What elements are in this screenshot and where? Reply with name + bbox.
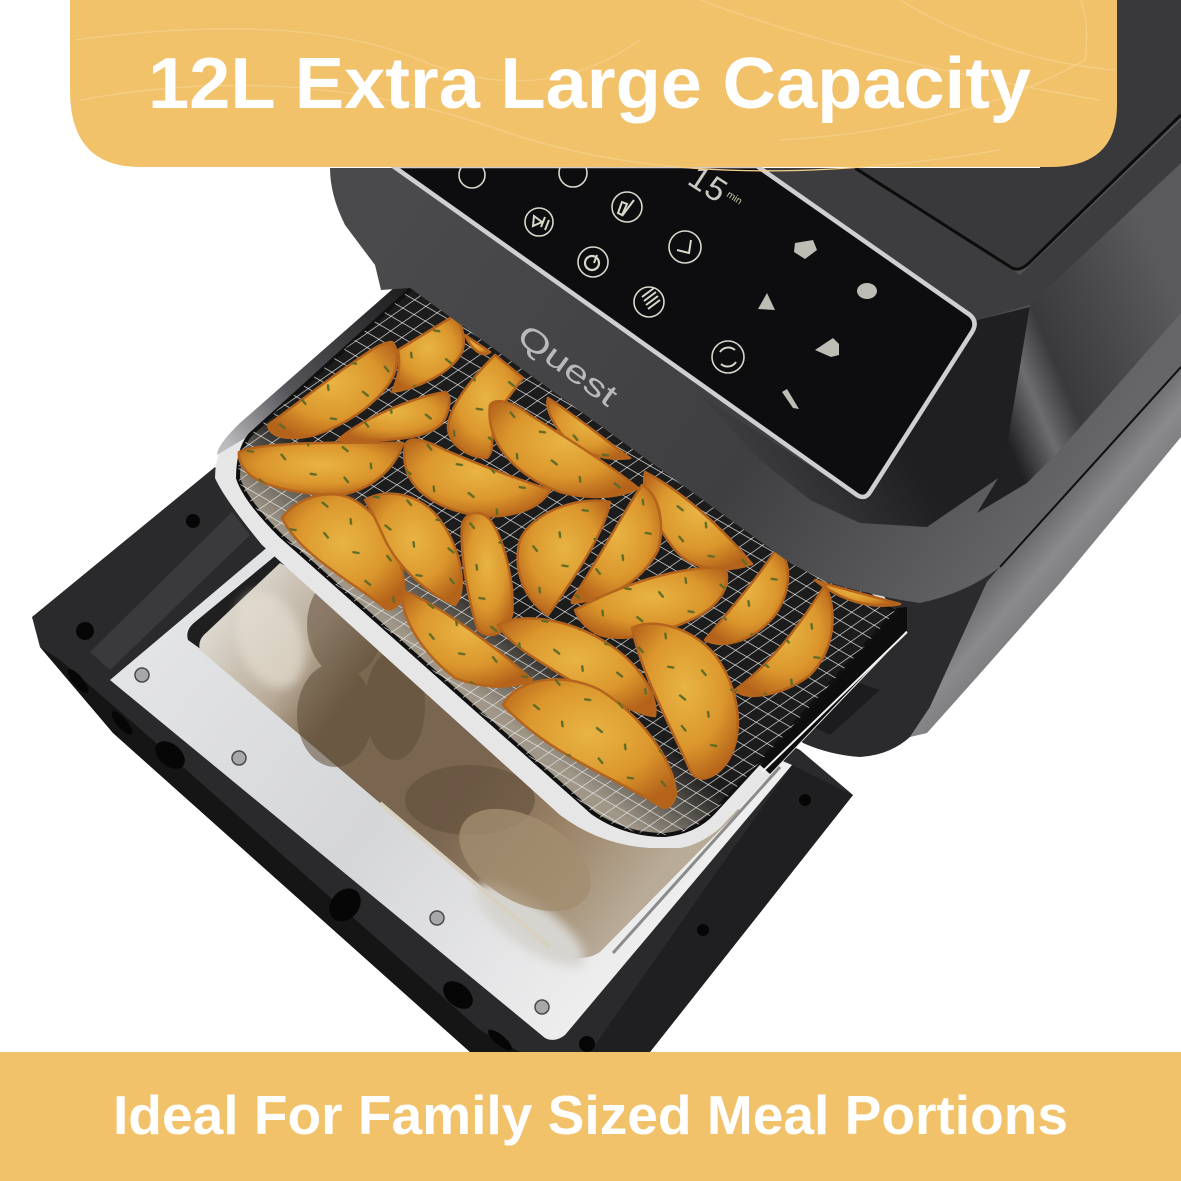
frame holes [65,514,811,1053]
mesh grid [238,288,895,835]
drawer frame [32,467,853,1053]
wedge shadows in tray [297,573,535,835]
tray screws [135,668,549,1014]
lower air fryer body [760,367,1181,757]
potato wedges [239,317,900,808]
control panel: min [724,189,744,207]
brand logo: Quest [511,317,625,414]
panel icons [459,159,744,373]
pale highlights in tray [223,582,596,980]
wire basket [215,280,907,848]
air fryer upper body [330,0,1181,603]
top banner [70,0,1117,171]
tray window [199,563,740,958]
subheading: Ideal For Family Sized Meal Portions [113,1084,1068,1146]
food icons [758,240,877,409]
lid [855,0,1181,269]
timer display: 15 [682,158,735,210]
drawer tray [110,545,792,1040]
control panel [393,158,975,497]
heading: 12L Extra Large Capacity [148,44,1031,124]
bottom banner [0,1052,1181,1181]
